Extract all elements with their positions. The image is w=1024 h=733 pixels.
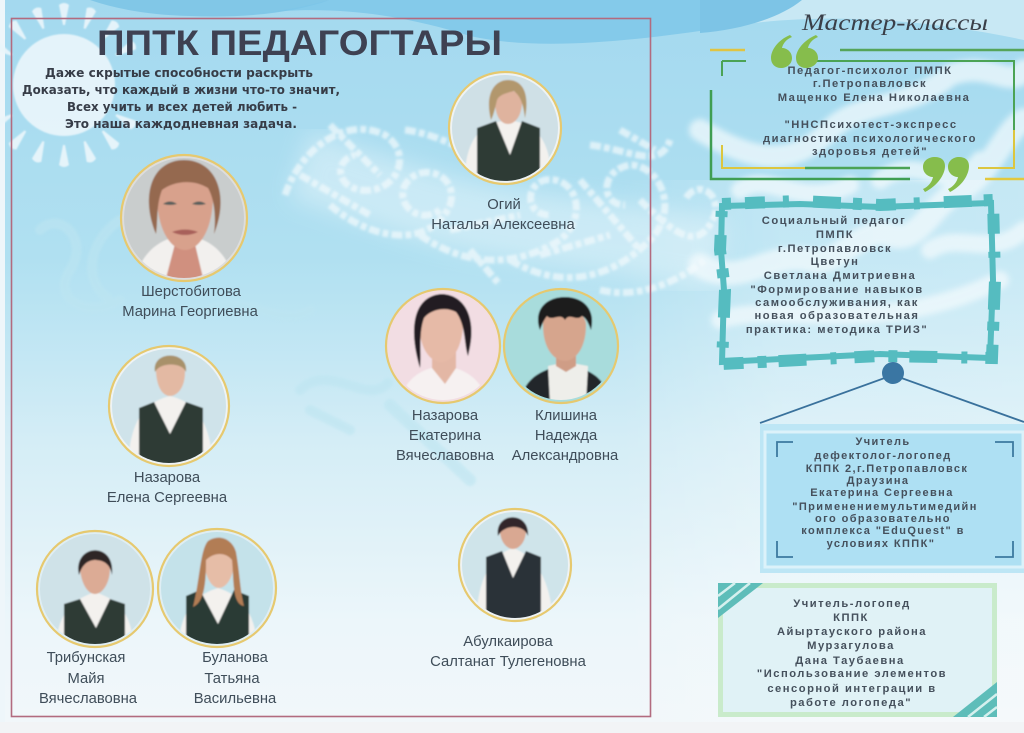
- decorative faint ornament: [40, 220, 470, 480]
- icon: closing quote: [923, 157, 969, 192]
- heading: Мастер-классы: Мастер-классы: [801, 10, 988, 35]
- icon: opening quote: [771, 35, 818, 68]
- text: логопед: Учитель-логопед: [793, 598, 911, 610]
- frame: green and yellow lines: [710, 50, 1024, 179]
- portrait: Шерстобитова: [120, 155, 250, 285]
- portrait: Абулкаирова: [459, 509, 571, 621]
- text: дефектолог: КППК 2,г.Петропавловск: [806, 463, 968, 475]
- decorative ornament right: [700, 70, 1024, 320]
- text: дефектолог: комплекса "EduQuest" в: [801, 525, 965, 537]
- name: Абулкаирова: Абулкаирова: [463, 634, 553, 650]
- text: социальный педагог: практика: методика ТРИЗ": [746, 324, 928, 336]
- name: Клишина: [512, 408, 619, 464]
- name: Назарова Екатерина: [396, 408, 495, 464]
- name: Шерстобитова: [122, 284, 259, 320]
- name: Назарова Екатерина: Вячеславовна: [396, 448, 495, 464]
- corner stripes: top left: [718, 583, 763, 618]
- text: логопед: работе логопеда": [790, 697, 912, 709]
- name: Огий: Наталья Алексеевна: [431, 217, 575, 233]
- name: Назарова Екатерина: Екатерина: [409, 428, 482, 444]
- text: психолог: диагностика психологического: [763, 133, 977, 145]
- name: Назарова Екатерина: Назарова: [412, 408, 479, 424]
- name: Буланова: Васильевна: [194, 691, 277, 707]
- portrait: Трибунская: [37, 531, 153, 650]
- panel: дефектолог: [760, 424, 1024, 573]
- text: психолог: Мащенко Елена Николаевна: [778, 92, 970, 104]
- panel: психолог: [710, 35, 1024, 192]
- name: Трибунская: Вячеславовна: [39, 691, 138, 707]
- text: дефектолог: условиях КППК": [827, 538, 935, 550]
- text: психолог: здоровья детей": [812, 146, 928, 158]
- decorative ornament underlay: [300, 165, 720, 255]
- text: социальный педагог: Цветун: [811, 256, 859, 268]
- name: Буланова: [194, 650, 277, 707]
- name: Шерстобитова: Марина Георгиевна: [122, 304, 259, 320]
- panel: логопед: [718, 583, 997, 717]
- name: Назарова Елена: [107, 470, 228, 506]
- portrait: Буланова: [158, 529, 276, 650]
- corner brackets: [777, 442, 1013, 557]
- name: Назарова Елена: Назарова: [134, 470, 201, 486]
- corner stripes: bottom right: [953, 682, 997, 717]
- connector: hanger with dot: [760, 362, 1024, 423]
- text: психолог: Педагог-психолог ПМПК: [788, 65, 952, 77]
- name: Клишина: Александровна: [512, 448, 619, 464]
- text: логопед: Дана Таубаевна: [795, 655, 905, 667]
- poem: Всех учить и всех детей любить -: [67, 99, 297, 114]
- name: Шерстобитова: Шерстобитова: [141, 284, 242, 300]
- text: дефектолог: "Применениемультимедийн: [792, 501, 978, 513]
- text: социальный педагог: г.Петропавловск: [778, 243, 892, 255]
- name: Трибунская: [39, 650, 138, 707]
- name: Трибунская: Трибунская: [47, 650, 125, 666]
- text: логопед: Мурзагулова: [807, 640, 895, 652]
- title: ППТК ПЕДАГОГТАРЫ: [97, 24, 502, 63]
- portrait: Огий: [449, 72, 561, 184]
- text: социальный педагог: [746, 215, 928, 336]
- name: Огий: [431, 197, 575, 233]
- decorative sun ornament: [0, 3, 138, 167]
- text: дефектолог: [792, 436, 978, 550]
- name: Абулкаирова: Салтанат Тулегеновна: [430, 654, 587, 670]
- main frame: [12, 18, 650, 716]
- panel: социальный педагог: [720, 200, 995, 364]
- text: социальный педагог: "Формирование навыков: [750, 284, 924, 296]
- name: Буланова: Татьяна: [204, 671, 260, 687]
- text: социальный педагог: Светлана Дмитриевна: [764, 270, 916, 282]
- portrait: Назарова Екатерина: [386, 289, 500, 403]
- name: Трибунская: Майя: [68, 671, 104, 687]
- text: дефектолог: ого образовательно: [815, 513, 951, 525]
- text: психолог: "ННСПсихотест-экспресс: [784, 119, 958, 131]
- text: логопед: Айыртауского района: [777, 626, 927, 638]
- text: дефектолог: дефектолог-логопед: [814, 450, 952, 462]
- poem: Это наша каждодневная задача.: [65, 116, 297, 131]
- text: социальный педагог: новая образовательная: [755, 310, 919, 322]
- name: Буланова: Буланова: [202, 650, 269, 666]
- poem: Доказать, что каждый в жизни что-то значит,: [22, 82, 340, 97]
- text: социальный педагог: ПМПК: [816, 229, 854, 241]
- poem: [22, 65, 340, 131]
- name: Абулкаирова: [430, 634, 587, 670]
- portrait: Клишина: [504, 289, 619, 403]
- decorative ornament band: [285, 125, 716, 293]
- text: логопед: "Использование элементов: [757, 668, 947, 680]
- text: логопед: [757, 598, 947, 709]
- name: Клишина: Надежда: [535, 428, 598, 444]
- text: психолог: [763, 65, 977, 158]
- text: дефектолог: Екатерина Сергеевна: [810, 487, 954, 499]
- text: логопед: КППК: [833, 612, 869, 624]
- text: социальный педагог: самообслуживания, как: [755, 297, 919, 309]
- name: Огий: Огий: [487, 197, 521, 213]
- text: дефектолог: Учитель: [855, 436, 911, 448]
- text: психолог: г.Петропавловск: [813, 78, 927, 90]
- text: дефектолог: Драузина: [847, 475, 909, 487]
- text: социальный педагог: Социальный педагог: [762, 215, 906, 227]
- frame: teal brush: [720, 200, 995, 364]
- portrait: Назарова Елена: [109, 346, 230, 468]
- name: Клишина: Клишина: [535, 408, 598, 424]
- name: Назарова Елена: Елена Сергеевна: [107, 490, 228, 506]
- poem: Даже скрытые способности раскрыть: [45, 65, 313, 80]
- text: логопед: сенсорной интеграции в: [767, 683, 937, 695]
